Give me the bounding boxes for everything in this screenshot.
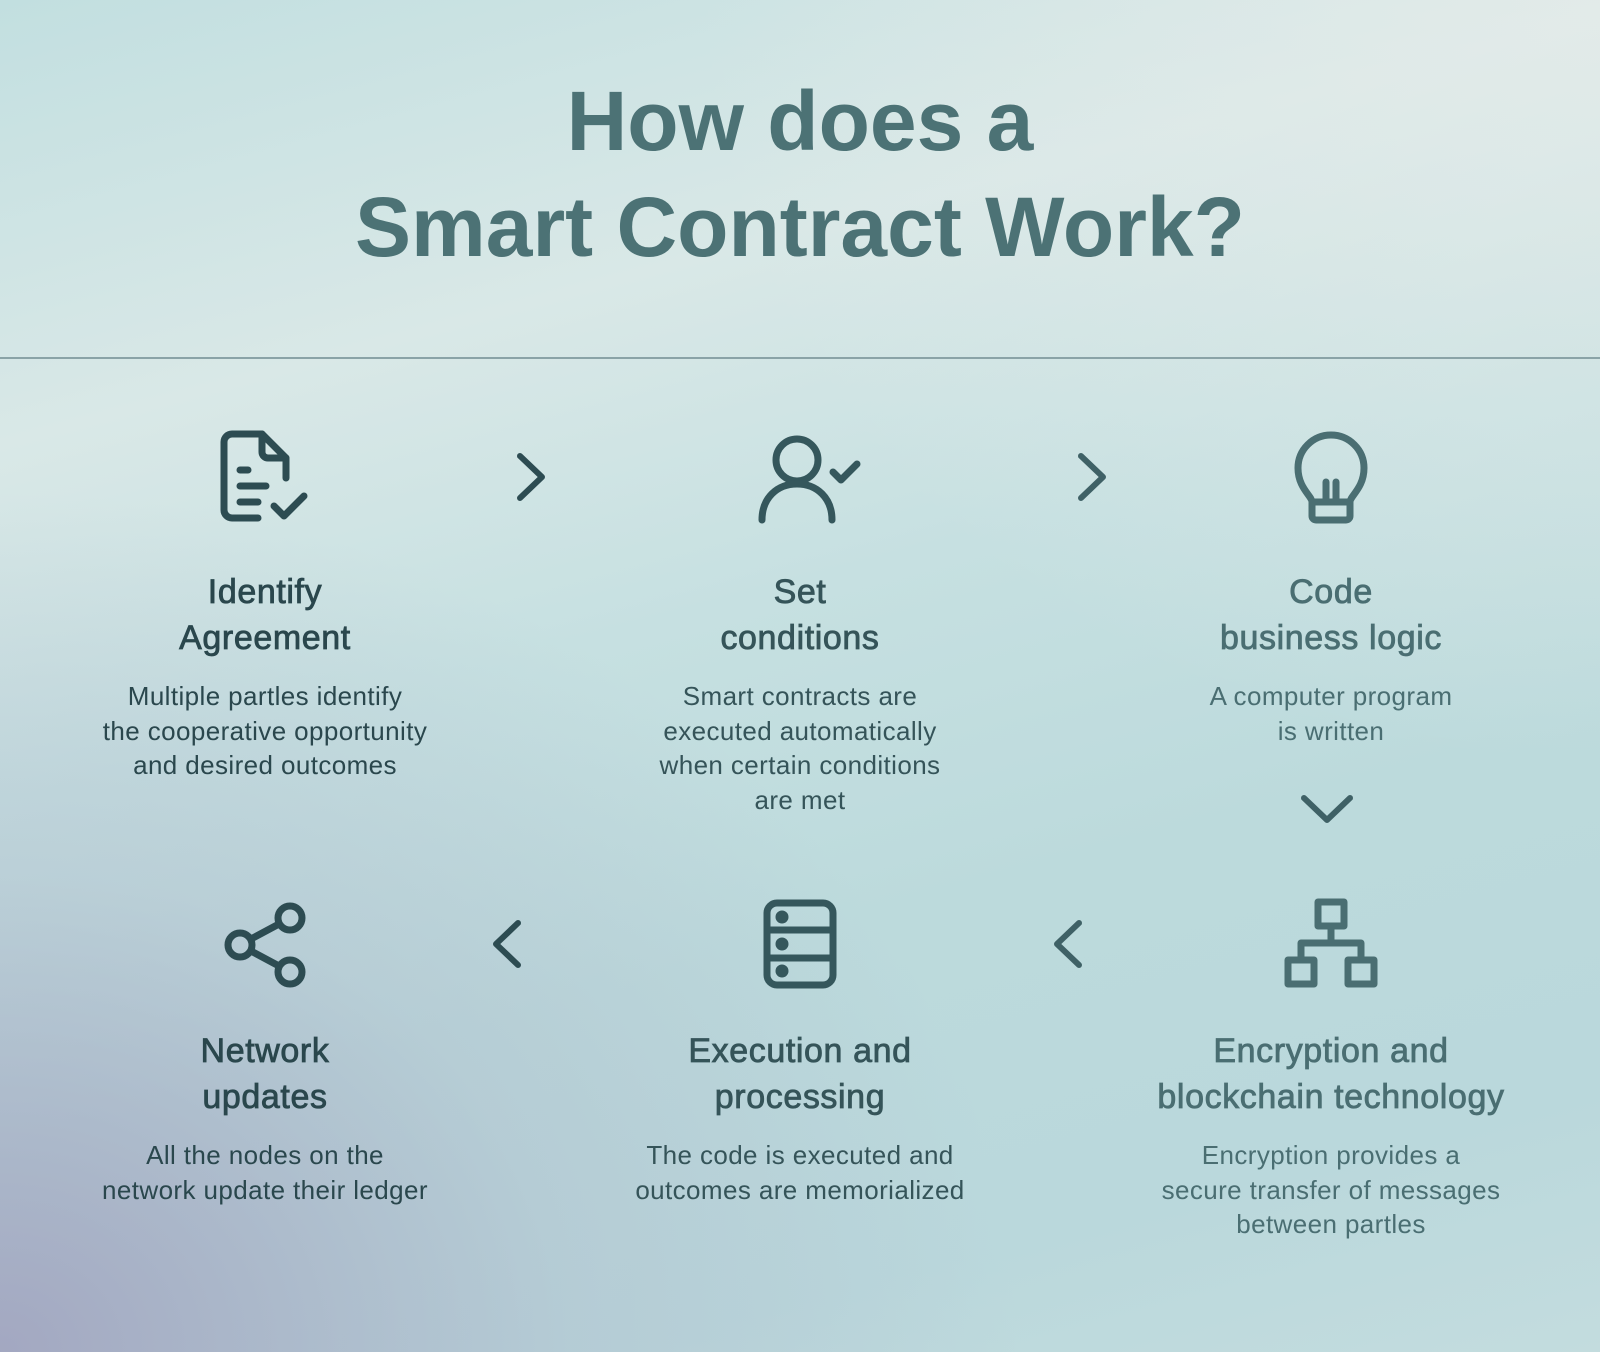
step 1: Multiple partles identify xyxy=(128,681,402,711)
step 2: conditions xyxy=(720,619,880,657)
step 4: secure transfer of messages xyxy=(1162,1174,1500,1204)
step 6: All the nodes on the xyxy=(146,1140,384,1170)
step 6: Network xyxy=(201,1032,329,1070)
step 2: Set xyxy=(774,573,826,611)
arrow: left 2 xyxy=(1054,920,1082,968)
step 2: Smart contracts are xyxy=(683,681,917,711)
icon: share xyxy=(224,902,306,988)
step 1: Agreement xyxy=(179,619,351,657)
step 4: Encryption provides a xyxy=(1202,1140,1460,1170)
step 5: processing xyxy=(715,1078,885,1116)
step 1: the cooperative opportunity xyxy=(103,716,427,746)
step 3: Code xyxy=(1289,573,1373,611)
step 1: and desired outcomes xyxy=(133,750,397,780)
step 6 xyxy=(102,1032,428,1204)
step 4 xyxy=(1157,1032,1505,1239)
step 2: when certain conditions xyxy=(660,750,940,780)
icon: document xyxy=(220,430,308,522)
step 3: A computer program xyxy=(1210,681,1452,711)
icon: server xyxy=(764,900,836,988)
step 3 xyxy=(1210,573,1452,746)
icon: user check xyxy=(758,436,860,524)
title: Smart Contract Work? xyxy=(355,180,1245,274)
icon: bulb xyxy=(1294,432,1368,524)
step 2: executed automatically xyxy=(663,716,937,746)
step 6: network update their ledger xyxy=(102,1174,428,1204)
step 2: are met xyxy=(755,784,845,814)
icon: hierarchy xyxy=(1284,898,1378,988)
step 6: updates xyxy=(202,1078,328,1116)
step 3: is written xyxy=(1278,716,1384,746)
step 5: Execution and xyxy=(688,1032,912,1070)
step 2 xyxy=(660,573,940,814)
title: How does a xyxy=(567,74,1033,168)
arrow: left 1 xyxy=(493,920,521,968)
step 4: Encryption and xyxy=(1213,1032,1449,1070)
step 1 xyxy=(103,573,427,780)
step 5 xyxy=(635,1032,965,1204)
step 1: Identify xyxy=(208,573,322,611)
step 5: outcomes are memorialized xyxy=(635,1174,965,1204)
arrow: down xyxy=(1301,795,1353,823)
step 5: The code is executed and xyxy=(646,1140,954,1170)
arrow: right 2 xyxy=(1078,453,1106,501)
step 4: between partles xyxy=(1236,1209,1426,1239)
step 3: business logic xyxy=(1220,619,1442,657)
arrow: right 1 xyxy=(517,453,545,501)
title xyxy=(355,74,1245,274)
step 4: blockchain technology xyxy=(1157,1078,1505,1116)
